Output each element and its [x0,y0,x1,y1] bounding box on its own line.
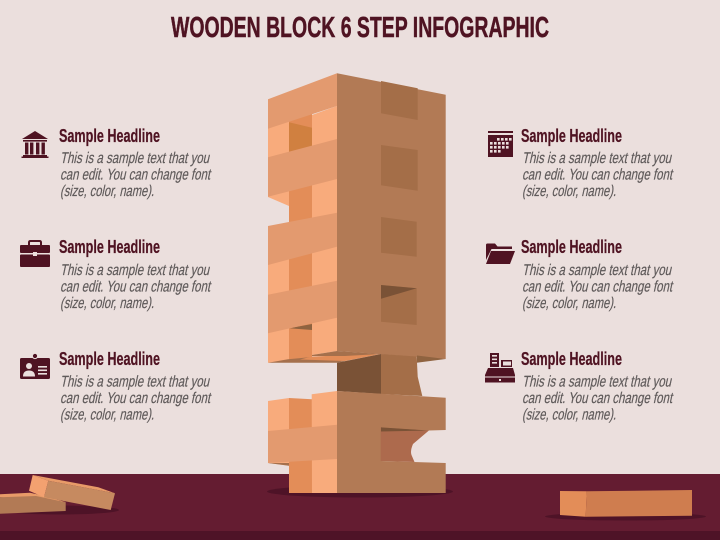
body text: can edit. You can change font [59,167,213,183]
tower lower right [337,391,446,493]
wooden block tower [267,73,453,498]
icon: bank [22,131,48,158]
shadow [1,506,119,514]
body text: This is a sample text that you [59,262,212,279]
body text: This is a sample text that you [59,150,212,167]
body text: (size, color, name). [59,183,157,200]
body text: (size, color, name). [521,183,619,200]
body text: (size, color, name). [59,295,157,312]
item 6: right [485,348,675,423]
band 4 [268,281,337,333]
shadow [545,512,706,520]
body text [521,374,675,423]
item 6: right: Sample Headline [521,348,622,369]
item 3: left: Sample Headline [59,348,160,369]
tower gap core [337,354,422,396]
item 2: left [20,236,213,312]
body text: This is a sample text that you [59,374,212,390]
body text: This is a sample text that you [521,262,674,279]
tower right face upper [337,73,446,363]
tower left face upper [268,73,381,363]
underside of upper tower [268,357,345,363]
body text: (size, color, name). [521,407,619,423]
tower shadow [267,486,453,498]
item 2: left: Sample Headline [59,236,160,257]
item 5: right: Sample Headline [521,236,622,257]
item 5: right [486,236,675,312]
item 1: left [22,125,213,200]
title: WOODEN BLOCK 6 STEP INFOGRAPHIC [171,12,549,44]
fallen blocks left [0,475,119,514]
item 4: right [488,125,675,200]
front block [33,475,115,493]
item 1: left: Sample Headline [59,125,160,146]
back block [0,493,66,502]
ground [0,474,720,540]
band 1 [268,73,337,129]
body text: This is a sample text that you [521,374,674,390]
body text: This is a sample text that you [521,150,674,167]
body text: can edit. You can change font [59,390,213,407]
item 4: right: Sample Headline [521,125,622,146]
icon: briefcase [20,241,50,267]
body text [59,374,213,423]
body text: (size, color, name). [59,407,157,423]
body text: can edit. You can change font [59,279,213,295]
body text: (size, color, name). [521,295,619,312]
icon: id card [20,353,50,379]
body text [59,150,213,200]
icon: cash register [485,353,515,382]
body text [521,262,675,312]
item 3: left [20,348,213,423]
band 3 [268,213,337,265]
icon: calendar [488,131,513,157]
body text [59,262,213,312]
band 2 [268,139,337,197]
icon: folder [486,244,515,264]
tower lower left [268,391,337,493]
body text [521,150,675,200]
fallen block right [545,490,706,520]
